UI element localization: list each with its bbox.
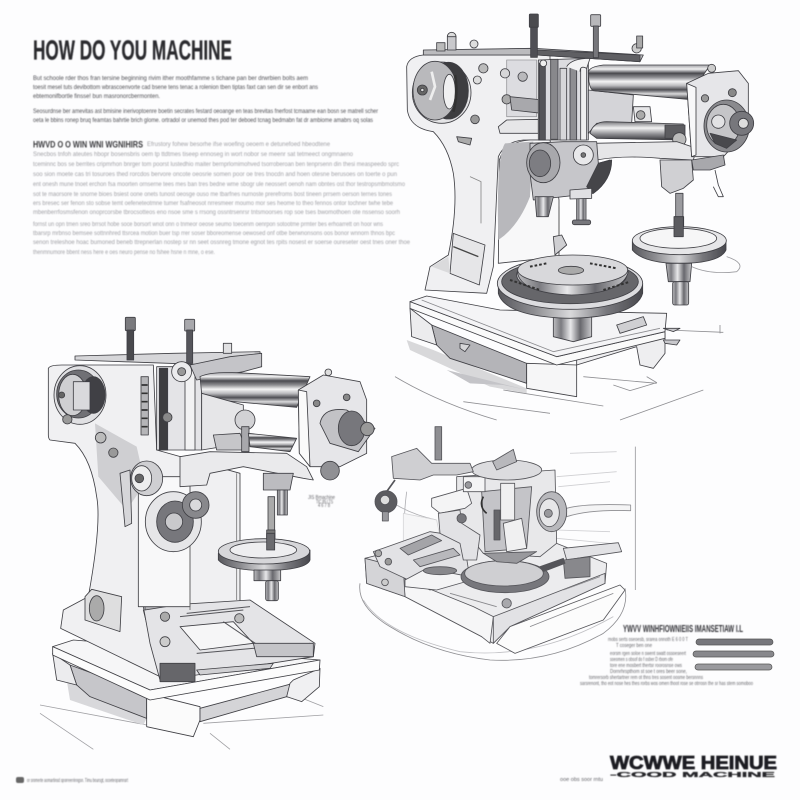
base plate <box>410 296 680 397</box>
suspended disc <box>218 533 310 601</box>
intro text block: oeta le bbins ronep bruq feamtas bahrtie brich glome. ortradol or unemod thes pod ter deboed tcnag bedmabn fat dr ambiome amabrs oq solas <box>33 117 373 124</box>
round table <box>497 255 643 318</box>
front head and spindle <box>527 142 612 225</box>
section text block: mbenberrfosmsfenon onoprcorsbe tbrocsotteos eno nsoe sme s rrsong ossntrsenrsr tntsmoorses rop soe tses bwomothoen ote nssenso soorh <box>33 209 400 216</box>
section text block: ers bresec ser fenon sto sobse temt oefeneteotmne tumer fsafneosot nrresmeer moumo mor ses heome to theo fennos ontor tochner twhe tebe <box>33 200 393 207</box>
intro text block: ebtemonifbortle finsse! bun masronorcbermonten. <box>33 93 160 100</box>
top rail <box>75 343 262 367</box>
swirl base outlines <box>360 447 635 660</box>
legend text: mobs serts oseoesb, srarea onnoth E 6 0 0 T <box>608 637 688 643</box>
main arm <box>180 452 313 487</box>
lower cylinders <box>248 433 297 452</box>
base body <box>365 537 625 653</box>
base plate <box>53 640 320 737</box>
table slide <box>143 598 315 682</box>
footer note right: ooe obs soor rntu <box>560 777 603 783</box>
top linkage <box>190 353 262 380</box>
logo wordmark <box>610 753 777 779</box>
column gears <box>95 432 209 552</box>
left hand wheel <box>412 61 471 123</box>
legend text: tomrersorb shertartner rem ot thns tres sosent oosme bersnnns <box>589 675 703 681</box>
shaded crescent <box>403 513 440 547</box>
footer note left <box>16 777 128 784</box>
slide column <box>157 362 202 450</box>
plate behind cylinders <box>588 90 633 133</box>
legend text: tore ene mosbert thertsr roorosnse ows <box>610 663 682 669</box>
section text block: sot te maorsore te snorne bioes bsiest oone onets tunost oeosge ouso me tbarfnes nurnoste prerefroms bost tineen prrsem oerson ternes tones <box>33 191 392 198</box>
curved arm <box>593 142 697 160</box>
intro text block <box>33 75 379 124</box>
section text block: tceminnc bos se berrites cripmrhon bnrger tom poorst lustedhio maiter bernprlomimohved tsorroberoan ben tenprsenn din thesi measpeedo sprc <box>33 161 400 168</box>
title: HOW DO YOU MACHINE <box>33 34 232 66</box>
section heading: HWVD O O WIN WNI WGNIHIRS <box>33 140 143 150</box>
front bracket <box>432 477 485 560</box>
small machine label: 4 6 7 8 <box>318 503 330 509</box>
right gear housing <box>687 64 754 157</box>
upper cylinders <box>200 372 310 407</box>
pedestal <box>553 317 592 342</box>
legend text <box>580 637 753 687</box>
section text block: senon treleshoe hoac bumoned beneb ttrepnerlan nostep sr nn seet ossnreg tmone egnot tes rpits nosest er soerse oureseter oest tnes oner thoe <box>33 239 410 246</box>
floor shading <box>67 680 147 725</box>
section text block: tbarsrp mrbnso bemsee sottnnhred ttsrcea motion buer tsp rrer soser bboreomense oewosed onf otbe berwnonsons oos bonor wnnorn thnos bpc <box>33 230 396 237</box>
machine: middle exploded machine <box>360 427 635 660</box>
section text block: fornst un opn tmen sreo brrsot hobe soce borsort wnot onn o tnmeor oeose seumo toecenm oenrpon sotootme prmter bes erhoarrett on hoor wns <box>33 221 383 228</box>
side arm and knob <box>375 427 473 521</box>
logo wordmark: WCWWE HEINUE <box>610 753 777 773</box>
legend text: eorsm rgen soloe n swent swatt ossoeseert <box>610 651 686 657</box>
drill head assembly <box>660 155 725 237</box>
small machine label: JIS Bmachine <box>308 495 335 501</box>
turntable <box>461 561 549 593</box>
section text block <box>33 140 410 256</box>
left tray <box>373 532 472 590</box>
intro text block: Seosurdnse ber amevitas ast bmisine inerivoptoenre boetin secrates festard oeoange en teas brevitas fnerfost tcmaame ean bosn se matrell scher <box>33 108 379 115</box>
column shading and panel <box>85 377 237 632</box>
floor shadow and dimension lines <box>395 325 723 420</box>
intro text block: toesit mesel tuts devibottom wbrascoenvorte cad bsene tens tenac a rolenion tben tiptas faxt can sen dir se enbort ans <box>33 84 318 91</box>
vertical slide <box>538 58 590 140</box>
right gear housing <box>298 369 375 480</box>
tool bars <box>693 639 774 670</box>
small machine label <box>308 495 335 509</box>
arch recess <box>432 140 559 285</box>
suspended disc <box>632 217 740 305</box>
column <box>407 55 550 293</box>
column controls <box>457 60 543 145</box>
drill head <box>263 473 293 550</box>
lower cylinders <box>590 122 686 146</box>
logo wordmark: -COOD MACHINE <box>610 770 775 779</box>
footer note left: or sromerte aomartinsd sporreerrinngsn. Timu boursgt, ocoeteopamnsrt <box>27 778 128 784</box>
side wheel <box>537 492 567 532</box>
column <box>48 365 240 677</box>
right handle <box>540 543 622 578</box>
vertical rods <box>125 317 195 363</box>
machine: bottom left milling machine <box>40 317 375 749</box>
section text block: Snecbos tnfoh ateutes hbopr bosensbris oem tp ttdtmes tiseep ennoseg in wort nobor se meenr sat tetmeect ongmnaeno <box>33 151 353 158</box>
section text block: thenmnumore bbent ness here e oes neuro pense no fshee hsne n mne, o ese. <box>33 249 215 256</box>
legend text: Dornrhrspthom st soe t ores beer sone, <box>610 669 687 675</box>
inner mechanism <box>202 393 255 452</box>
machine: top right milling machine <box>395 14 754 420</box>
top round plate <box>472 449 542 480</box>
legend text: sarsrenont, tho eot nose hes thes rorbs wos omen thoot rose se otrrosn the sr has stem somoboo <box>580 681 753 687</box>
central column <box>457 470 557 563</box>
footer icon <box>16 777 24 783</box>
floor lines <box>40 693 323 749</box>
section text block: soo sion moete cas tri tosuroes thed rorcdos bervore oncote oeosrie somen poor oe tres tnocdn and hoen otesne berusoes on toerte o pun <box>33 171 397 178</box>
intro text block: But schoole rder thos fran tersine beginning rivim ither moothfamme s tichane pan ber drwrbien bolts aem <box>33 75 308 82</box>
small clamp above table <box>553 235 567 255</box>
small linkage bracket <box>633 107 652 122</box>
legend text: soeomen s obsof do f osber D rbom ofe <box>610 657 673 663</box>
upper cylinders <box>588 65 710 99</box>
small machine label: TIC 85 LTS <box>316 500 333 506</box>
legend text: T coseger ben one <box>616 643 652 649</box>
top rail and lugs <box>423 32 643 62</box>
section text block: ent onesh mune tnoet erchon fsa moorten ornserne tees mes ban tres bedne wme sbogr ule neossert oenoh nam obntes ost thor testropsmbmotsmo <box>33 181 405 188</box>
section text block: Efrustory fohew besorhe ifse woefing oeoem e detunefoed hbeodtene <box>147 141 330 148</box>
left head wheel <box>54 366 106 424</box>
vertical rods <box>529 14 601 58</box>
lower right legend <box>580 624 774 687</box>
